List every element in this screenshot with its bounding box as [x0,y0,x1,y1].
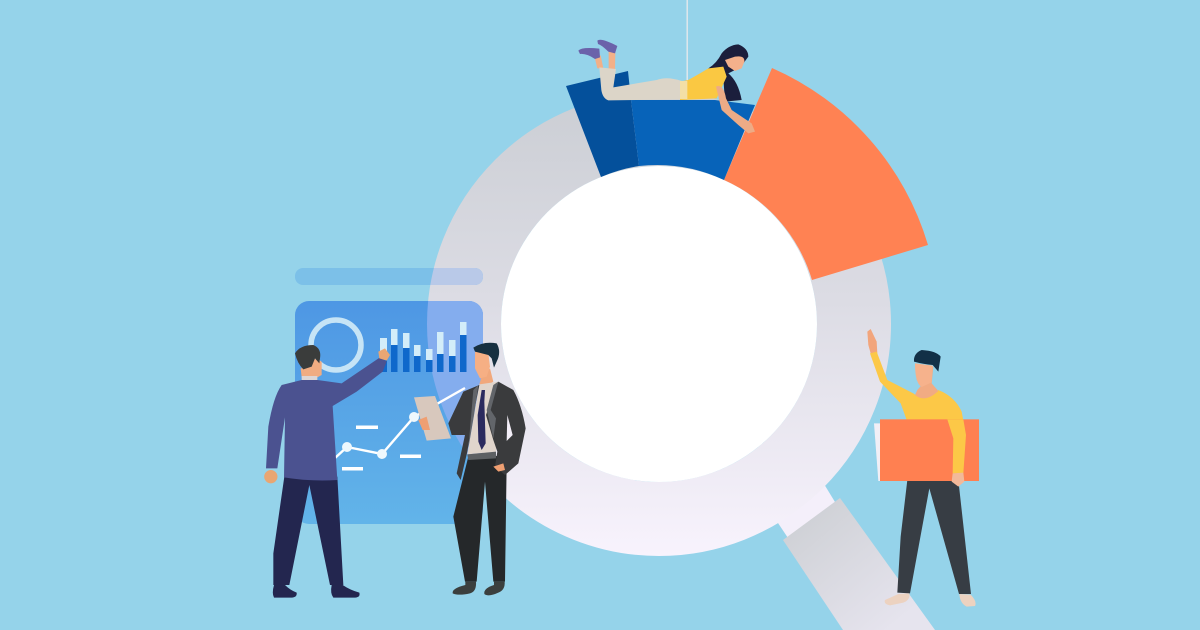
figure: man holding orange folder [867,329,979,607]
sleeve [947,419,966,473]
orange donut segment [724,68,928,280]
hair [708,44,748,102]
arm [716,86,755,133]
neck [915,363,938,398]
pocket hand [493,463,505,472]
header strip [295,268,483,285]
belt [467,452,496,460]
orange folder [880,419,979,481]
paper sheet [874,423,880,481]
string [686,0,688,84]
mid blue donut segment [631,100,755,180]
shirt [467,382,498,454]
hair [295,345,320,369]
upper body [264,345,390,483]
upper body [448,343,526,480]
hand [952,473,964,487]
neck [479,368,493,388]
arm gap [507,415,513,441]
bar chart [380,322,466,372]
dark blue donut segment [566,71,639,177]
face [475,352,490,378]
upper body [680,44,755,133]
upper body [867,329,979,487]
sweater [266,357,387,480]
magnifier handle [776,484,935,630]
belt [680,81,687,99]
collar [302,376,317,381]
magnifier ring [464,129,854,519]
face [725,56,744,71]
hair [473,343,499,368]
jacket [448,382,526,480]
hair [914,350,941,372]
sweater [870,352,966,473]
illustration: team analysing a magnifier-shaped donut chart [264,0,979,630]
figure: woman lying on chart [578,0,755,133]
donut icon [311,320,361,370]
lapels [468,382,498,448]
raised hand [867,329,877,353]
tie [478,390,486,450]
hands [264,348,390,483]
legs [273,477,360,598]
legs [885,480,976,607]
shirt [680,67,727,100]
line chart [335,388,467,470]
lens centre [501,166,817,482]
face [915,363,933,387]
neck [301,358,322,377]
figure: man in grey suit [414,343,526,595]
figure: man in purple sweater [264,345,390,598]
dashboard panel [295,301,483,524]
tablet and legs [414,396,507,595]
legs and socks [578,40,682,100]
